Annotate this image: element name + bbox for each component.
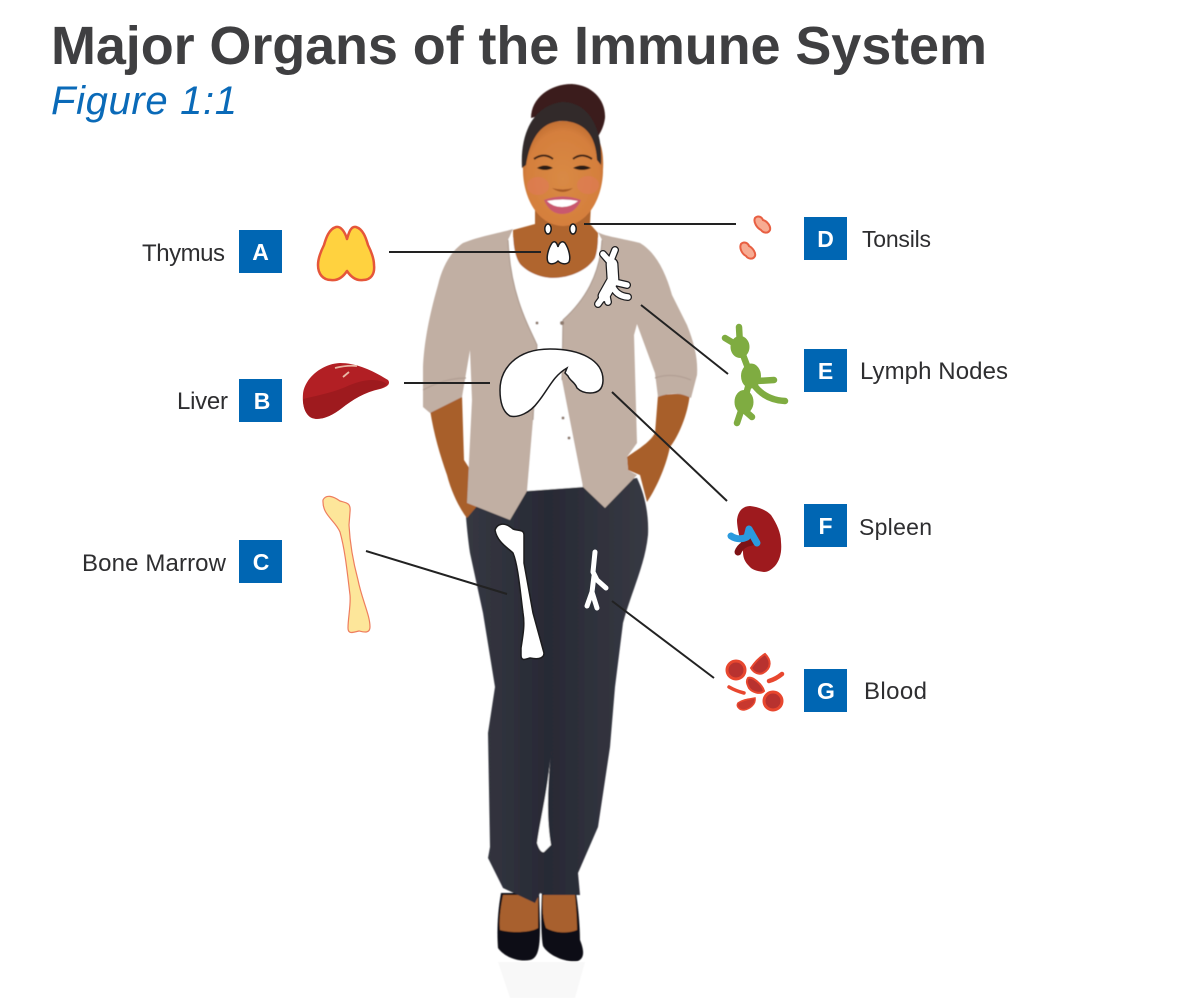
- label B: Liver: Liver: [177, 388, 228, 415]
- floor reflection: [498, 962, 585, 998]
- label B: Liver: B: [254, 388, 270, 414]
- cardigan placket and cuff shading: [423, 240, 691, 420]
- label C: Bone Marrow: Bone Marrow: [82, 550, 227, 577]
- leader line: bone marrow: [366, 551, 507, 594]
- body overlay: thymus: [547, 242, 570, 264]
- label C: Bone Marrow: [82, 540, 282, 583]
- body overlay: bone: [495, 524, 544, 660]
- label C: Bone Marrow: C: [253, 549, 269, 575]
- label G: Blood: G: [817, 678, 835, 704]
- body overlay: liver and spleen: [500, 349, 603, 416]
- label A: Thymus: A: [252, 239, 269, 265]
- icon: lymph nodes: [725, 327, 785, 423]
- woman photo figure: [423, 84, 697, 998]
- label F: Spleen: F: [818, 513, 833, 539]
- label F: Spleen: Spleen: [859, 514, 932, 540]
- trousers: [465, 478, 648, 903]
- label B: Liver: [177, 379, 282, 422]
- leader line: blood: [612, 601, 714, 678]
- body overlay: tonsils: [545, 224, 576, 234]
- label D: Tonsils: Tonsils: [862, 226, 931, 252]
- leader line: lymph nodes: [641, 305, 728, 374]
- gap between legs: [537, 750, 551, 852]
- white top: [508, 238, 602, 491]
- label G: Blood: Blood: [864, 678, 927, 705]
- leader line: thymus: [389, 251, 541, 253]
- label D: Tonsils: D: [817, 226, 834, 252]
- icon: liver: [303, 363, 389, 419]
- label E: Lymph Nodes: Lymph Nodes: [860, 358, 1008, 385]
- label D: Tonsils: [804, 217, 931, 260]
- leader line: spleen: [612, 392, 727, 501]
- forearms and hands: [430, 393, 690, 518]
- label A: Thymus: [142, 230, 282, 273]
- icon: bone: [323, 496, 370, 632]
- body overlay: blood vessels: [587, 552, 606, 608]
- cardigan buttons: [536, 321, 570, 440]
- label E: Lymph Nodes: [804, 349, 1008, 392]
- icon: spleen: [731, 506, 781, 572]
- label E: Lymph Nodes: E: [818, 358, 833, 384]
- leader line: liver: [404, 382, 490, 384]
- label G: Blood: [804, 669, 927, 712]
- hair bun: [531, 84, 605, 138]
- beige cardigan: [423, 229, 697, 520]
- label F: Spleen: [804, 504, 932, 547]
- icon: blood cells: [727, 654, 782, 710]
- neck and chest skin: [513, 205, 598, 278]
- leader line: tonsils: [584, 223, 736, 225]
- shoes and feet: [497, 893, 583, 961]
- label A: Thymus: Thymus: [142, 240, 225, 267]
- icon: tonsils: [740, 217, 770, 259]
- title: Major Organs of the Immune System: [51, 16, 987, 76]
- body overlay: lymph nodes: [598, 250, 628, 304]
- icon: thymus: [318, 227, 374, 280]
- subtitle: figure number: Figure 1:1: [51, 79, 237, 123]
- head: [522, 102, 603, 226]
